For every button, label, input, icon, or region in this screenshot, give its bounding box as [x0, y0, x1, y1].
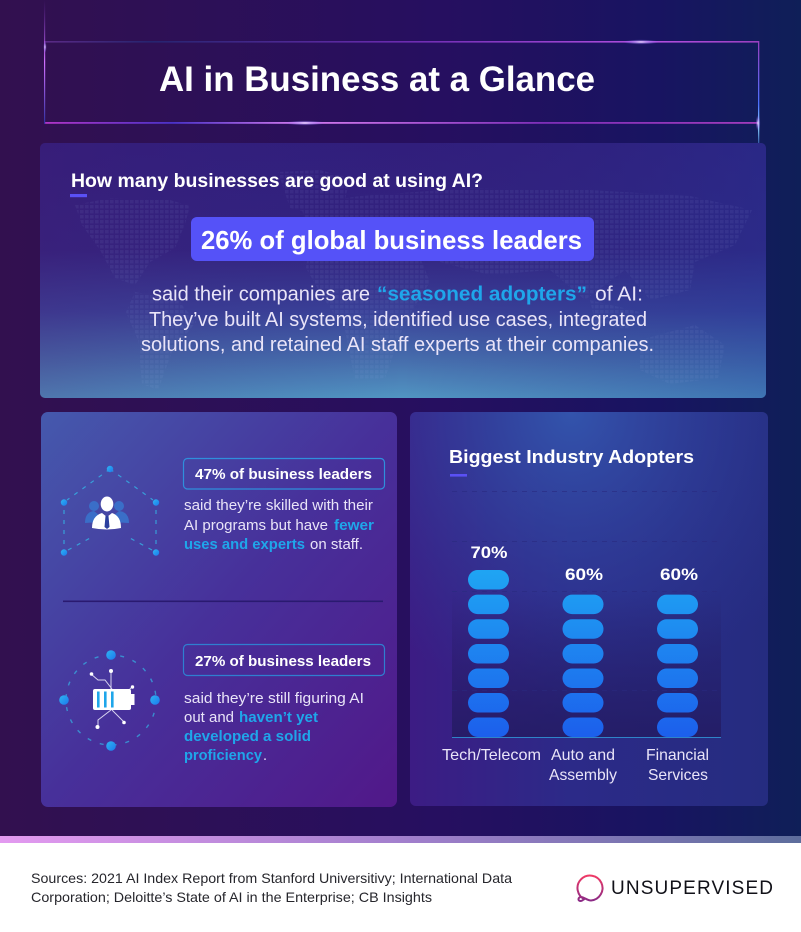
logo: unsupervised [577, 876, 773, 901]
text block: seasoned adopters: said their companies are [152, 284, 370, 306]
bar chart: 60% [660, 565, 698, 584]
logo: unsupervised: UNSUPERVISED [611, 878, 773, 899]
text block: 47% detail: AI programs but have [184, 518, 328, 534]
accent band [0, 836, 801, 843]
text block: 47% detail: fewer [334, 518, 374, 534]
sources: Corporation; Deloitte’s State of AI in the Enterprise; CB Insights [31, 889, 432, 905]
callout: 27% of business leaders [184, 644, 384, 676]
sources [31, 870, 512, 905]
callout: 47% of business leaders: 47% of business leaders [195, 466, 372, 483]
bar chart: Auto and [551, 747, 615, 764]
bar chart: Financial [646, 747, 709, 764]
panel: seasoned adopters [40, 143, 766, 398]
callout: 26% of global business leaders [191, 217, 594, 261]
bar chart: 70% [470, 543, 508, 562]
world map [75, 170, 752, 322]
text block: 47% detail: on staff. [310, 537, 363, 553]
bar chart: Assembly [549, 767, 617, 784]
callout: 27% of business leaders: 27% of business leaders [195, 653, 371, 670]
text block: 27% detail: said they’re still figuring AI [184, 691, 364, 707]
text block: seasoned adopters: of AI: [595, 284, 643, 306]
text block: 27% detail [184, 691, 364, 764]
text block: seasoned adopters: “seasoned adopters” [377, 284, 587, 306]
text block: 27% detail: haven’t yet [239, 710, 318, 726]
panel: industry adopters [410, 412, 768, 806]
title: AI in Business at a Glance [159, 60, 595, 99]
bar chart: Tech/Telecom [442, 747, 541, 764]
bar chart: 60% [565, 565, 603, 584]
text block: 47% detail [184, 498, 374, 553]
text block: 47% detail: said they’re skilled with their [184, 498, 373, 514]
icon: AI battery circuit [59, 650, 160, 751]
text block: 27% detail: developed a solid [184, 729, 311, 745]
text block: 27% detail: out and [184, 710, 234, 726]
icon: person network [61, 466, 159, 556]
panel: business leaders [41, 412, 397, 807]
text block: 27% detail: . [263, 748, 267, 764]
text block: seasoned adopters: solutions, and retained AI staff experts at their companies. [141, 334, 654, 356]
text block: seasoned adopters: They’ve built AI systems, identified use cases, integrated [149, 309, 647, 331]
title frame [43, 0, 760, 156]
sources: Sources: 2021 AI Index Report from Stanford Universitivy; International Data [31, 870, 512, 886]
heading: biggest industry adopters: Biggest Industry Adopters [449, 446, 694, 467]
text block: 47% detail: uses and experts [184, 537, 305, 553]
bar chart: Services [648, 767, 708, 784]
text block: 27% detail: proficiency [184, 748, 262, 764]
text block: seasoned adopters [141, 284, 654, 356]
heading: how many businesses: How many businesses are good at using AI? [71, 171, 483, 192]
footer background [0, 843, 801, 932]
bar chart [442, 492, 721, 784]
callout: 26% of global business leaders: 26% of global business leaders [201, 225, 582, 255]
callout: 47% of business leaders [184, 458, 384, 489]
